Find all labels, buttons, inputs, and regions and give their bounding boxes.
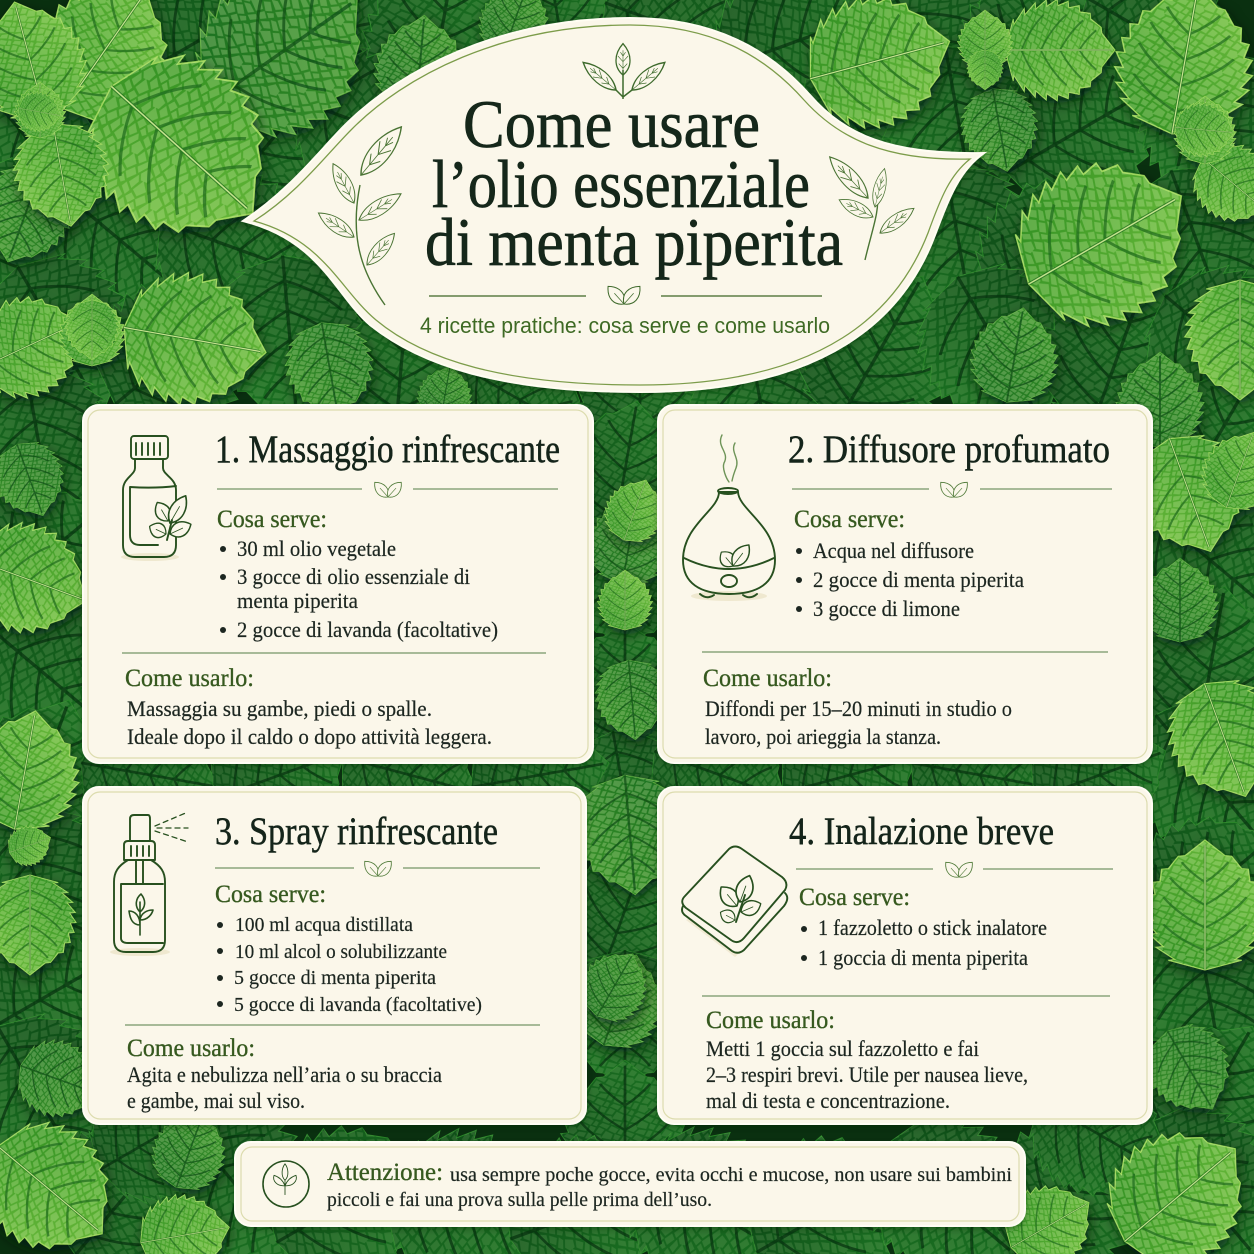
come usarlo: Come usarlo: [127,1035,255,1062]
cosa serve: 5 gocce di lavanda (facoltative) [234,994,482,1016]
come usarlo [702,652,1108,749]
icon: sprig in circle [263,1161,309,1207]
cosa serve: 30 ml olio vegetale [237,536,396,561]
cosa serve: 1 goccia di menta piperita [818,945,1028,970]
icon: top sprig [579,44,669,99]
cosa serve: menta piperita [237,588,358,613]
come usarlo: Massaggia su gambe, piedi o spalle. [127,696,432,721]
icon: bottle with sprig [121,436,194,561]
come usarlo: Metti 1 goccia sul fazzoletto e fai [706,1036,979,1061]
icon: right sprig [824,151,918,260]
icon: spray bottle [110,812,188,956]
icon: diffuser with steam [683,435,775,601]
come usarlo: Agita e nebulizza nell’aria o su braccia [127,1062,442,1087]
cosa serve: 5 gocce di menta piperita [234,967,436,989]
title panel: leaf-shaped badge [243,18,984,392]
come usarlo [125,1025,540,1113]
divider [215,858,540,880]
divider [217,479,558,501]
title text: di menta piperita [425,204,843,280]
come usarlo: lavoro, poi arieggia la stanza. [705,724,941,749]
come usarlo: Ideale dopo il caldo o dopo attività leggera. [127,724,492,749]
title text: Come usare [463,86,760,162]
heading: 4. Inalazione breve [789,810,1054,853]
cosa serve: Cosa serve: [799,884,910,911]
cosa serve: 1 fazzoletto o stick inalatore [818,915,1047,940]
panel: card 3 spray [83,787,586,1124]
cosa serve: Cosa serve: [217,506,327,533]
cosa serve: 3 gocce di olio essenziale di [237,564,470,589]
cosa serve: Cosa serve: [215,881,326,908]
cosa serve [217,506,498,642]
cosa serve: 2 gocce di lavanda (facoltative) [237,617,498,642]
warning text: piccoli e fai una prova sulla pelle prima dell’uso. [327,1189,712,1211]
title text [425,86,843,280]
come usarlo: Come usarlo: [703,665,832,692]
cosa serve [799,884,1047,970]
come usarlo: Come usarlo: [125,665,254,692]
come usarlo: mal di testa e concentrazione. [706,1088,950,1113]
warning text: Attenzione: [327,1159,443,1186]
cosa serve: Acqua nel diffusore [813,538,974,563]
divider [796,859,1113,881]
come usarlo [702,996,1110,1113]
cosa serve: 3 gocce di limone [813,596,960,621]
cosa serve: 2 gocce di menta piperita [813,567,1024,592]
heading: 1. Massaggio rinfrescante [215,428,560,471]
panel: card 4 inalazione [658,787,1152,1124]
come usarlo: Come usarlo: [706,1007,835,1034]
cosa serve [215,881,482,1016]
icon: left sprig [315,121,409,305]
panel: card 1 massaggio [83,405,593,763]
come usarlo: e gambe, mai sul viso. [127,1088,305,1113]
subtitle: 4 ricette pratiche: cosa serve e come usarlo [420,313,830,338]
title divider [429,282,822,308]
come usarlo: 2–3 respiri brevi. Utile per nausea lieve, [706,1062,1028,1087]
heading: 2. Diffusore profumato [788,428,1110,471]
cosa serve: Cosa serve: [794,506,905,533]
warning text: usa sempre poche gocce, evita occhi e mucose, non usare sui bambini [450,1164,1012,1186]
divider [792,479,1112,501]
heading: 3. Spray rinfrescante [215,810,498,853]
icon: folded handkerchief [682,846,787,957]
warning text [327,1159,1012,1211]
cosa serve: 10 ml alcol o solubilizzante [235,941,447,963]
cosa serve: 100 ml acqua distillata [235,914,413,936]
come usarlo [122,653,546,749]
title text: l’olio essenziale [432,146,810,222]
come usarlo: Diffondi per 15–20 minuti in studio o [705,696,1012,721]
panel: warning [235,1142,1025,1226]
panel: card 2 diffusore [658,405,1152,763]
cosa serve [794,506,1024,621]
